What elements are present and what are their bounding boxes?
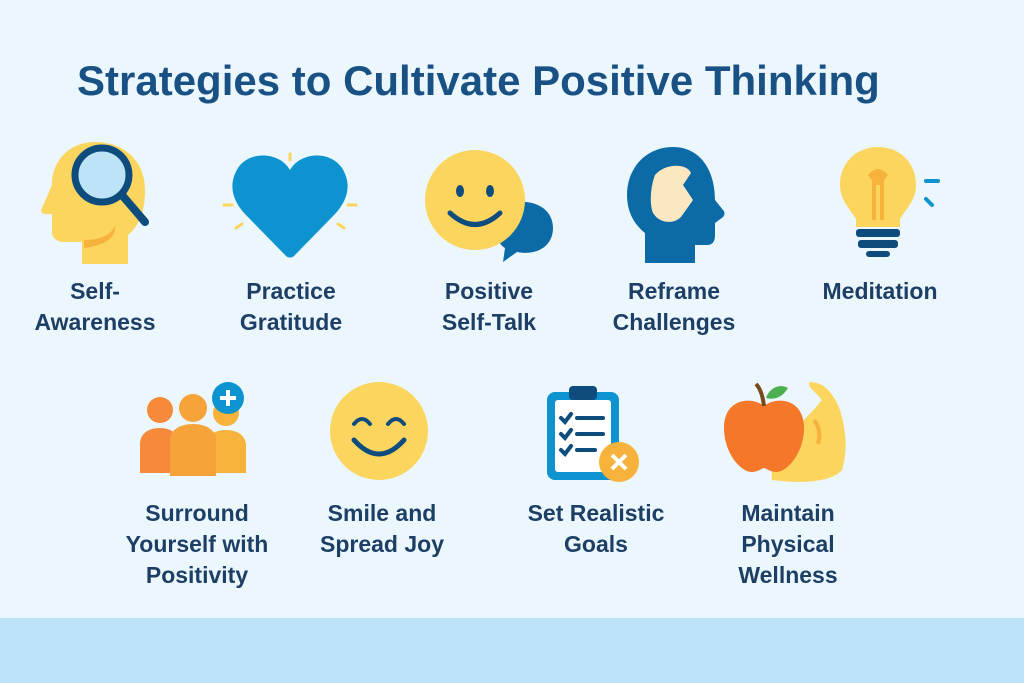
label: Self-Awareness: Self- <box>70 278 120 304</box>
label: Surround Yourself with Positivity <box>126 500 268 588</box>
title: Strategies to Cultivate Positive Thinking <box>77 57 880 104</box>
icon: smiley with speech bubble <box>425 150 553 262</box>
label: Surround Yourself with Positivity: Surround <box>145 500 249 526</box>
label: Maintain Physical Wellness: Maintain <box>741 500 835 526</box>
label: Set Realistic Goals <box>528 500 664 557</box>
label: Positive Self-Talk <box>442 278 536 335</box>
bottom band <box>0 618 1024 683</box>
label: Meditation: Meditation <box>822 278 938 304</box>
label: Surround Yourself with Positivity: Yourself with <box>126 531 268 557</box>
label: Self-Awareness: Awareness <box>34 309 156 335</box>
label: Reframe Challenges: Challenges <box>613 309 735 335</box>
icon: lightbulb <box>840 147 940 257</box>
label: Set Realistic Goals: Set Realistic <box>528 500 664 526</box>
label: Self-Awareness <box>34 278 156 335</box>
label: Practice Gratitude <box>240 278 342 335</box>
icon: clipboard <box>547 386 639 482</box>
icon: head with magnifier <box>41 142 149 264</box>
label: Smile and Spread Joy <box>320 500 444 557</box>
label: Maintain Physical Wellness: Wellness <box>738 562 838 588</box>
icon: people with plus <box>140 382 246 476</box>
icon: smile face <box>330 382 428 480</box>
icon: reframe head <box>627 147 724 263</box>
label: Practice Gratitude: Gratitude <box>240 309 342 335</box>
label: Maintain Physical Wellness: Physical <box>741 531 835 557</box>
label: Smile and Spread Joy: Spread Joy <box>320 531 444 557</box>
label: Reframe Challenges: Reframe <box>628 278 720 304</box>
label: Surround Yourself with Positivity: Positivity <box>146 562 248 588</box>
icon: apple and arm <box>724 382 846 482</box>
label: Reframe Challenges <box>613 278 735 335</box>
label: Set Realistic Goals: Goals <box>564 531 628 557</box>
label: Smile and Spread Joy: Smile and <box>328 500 436 526</box>
label: Positive Self-Talk: Self-Talk <box>442 309 536 335</box>
icon: heart <box>222 152 358 258</box>
label: Maintain Physical Wellness <box>738 500 838 588</box>
label: Practice Gratitude: Practice <box>246 278 336 304</box>
label: Positive Self-Talk: Positive <box>445 278 533 304</box>
